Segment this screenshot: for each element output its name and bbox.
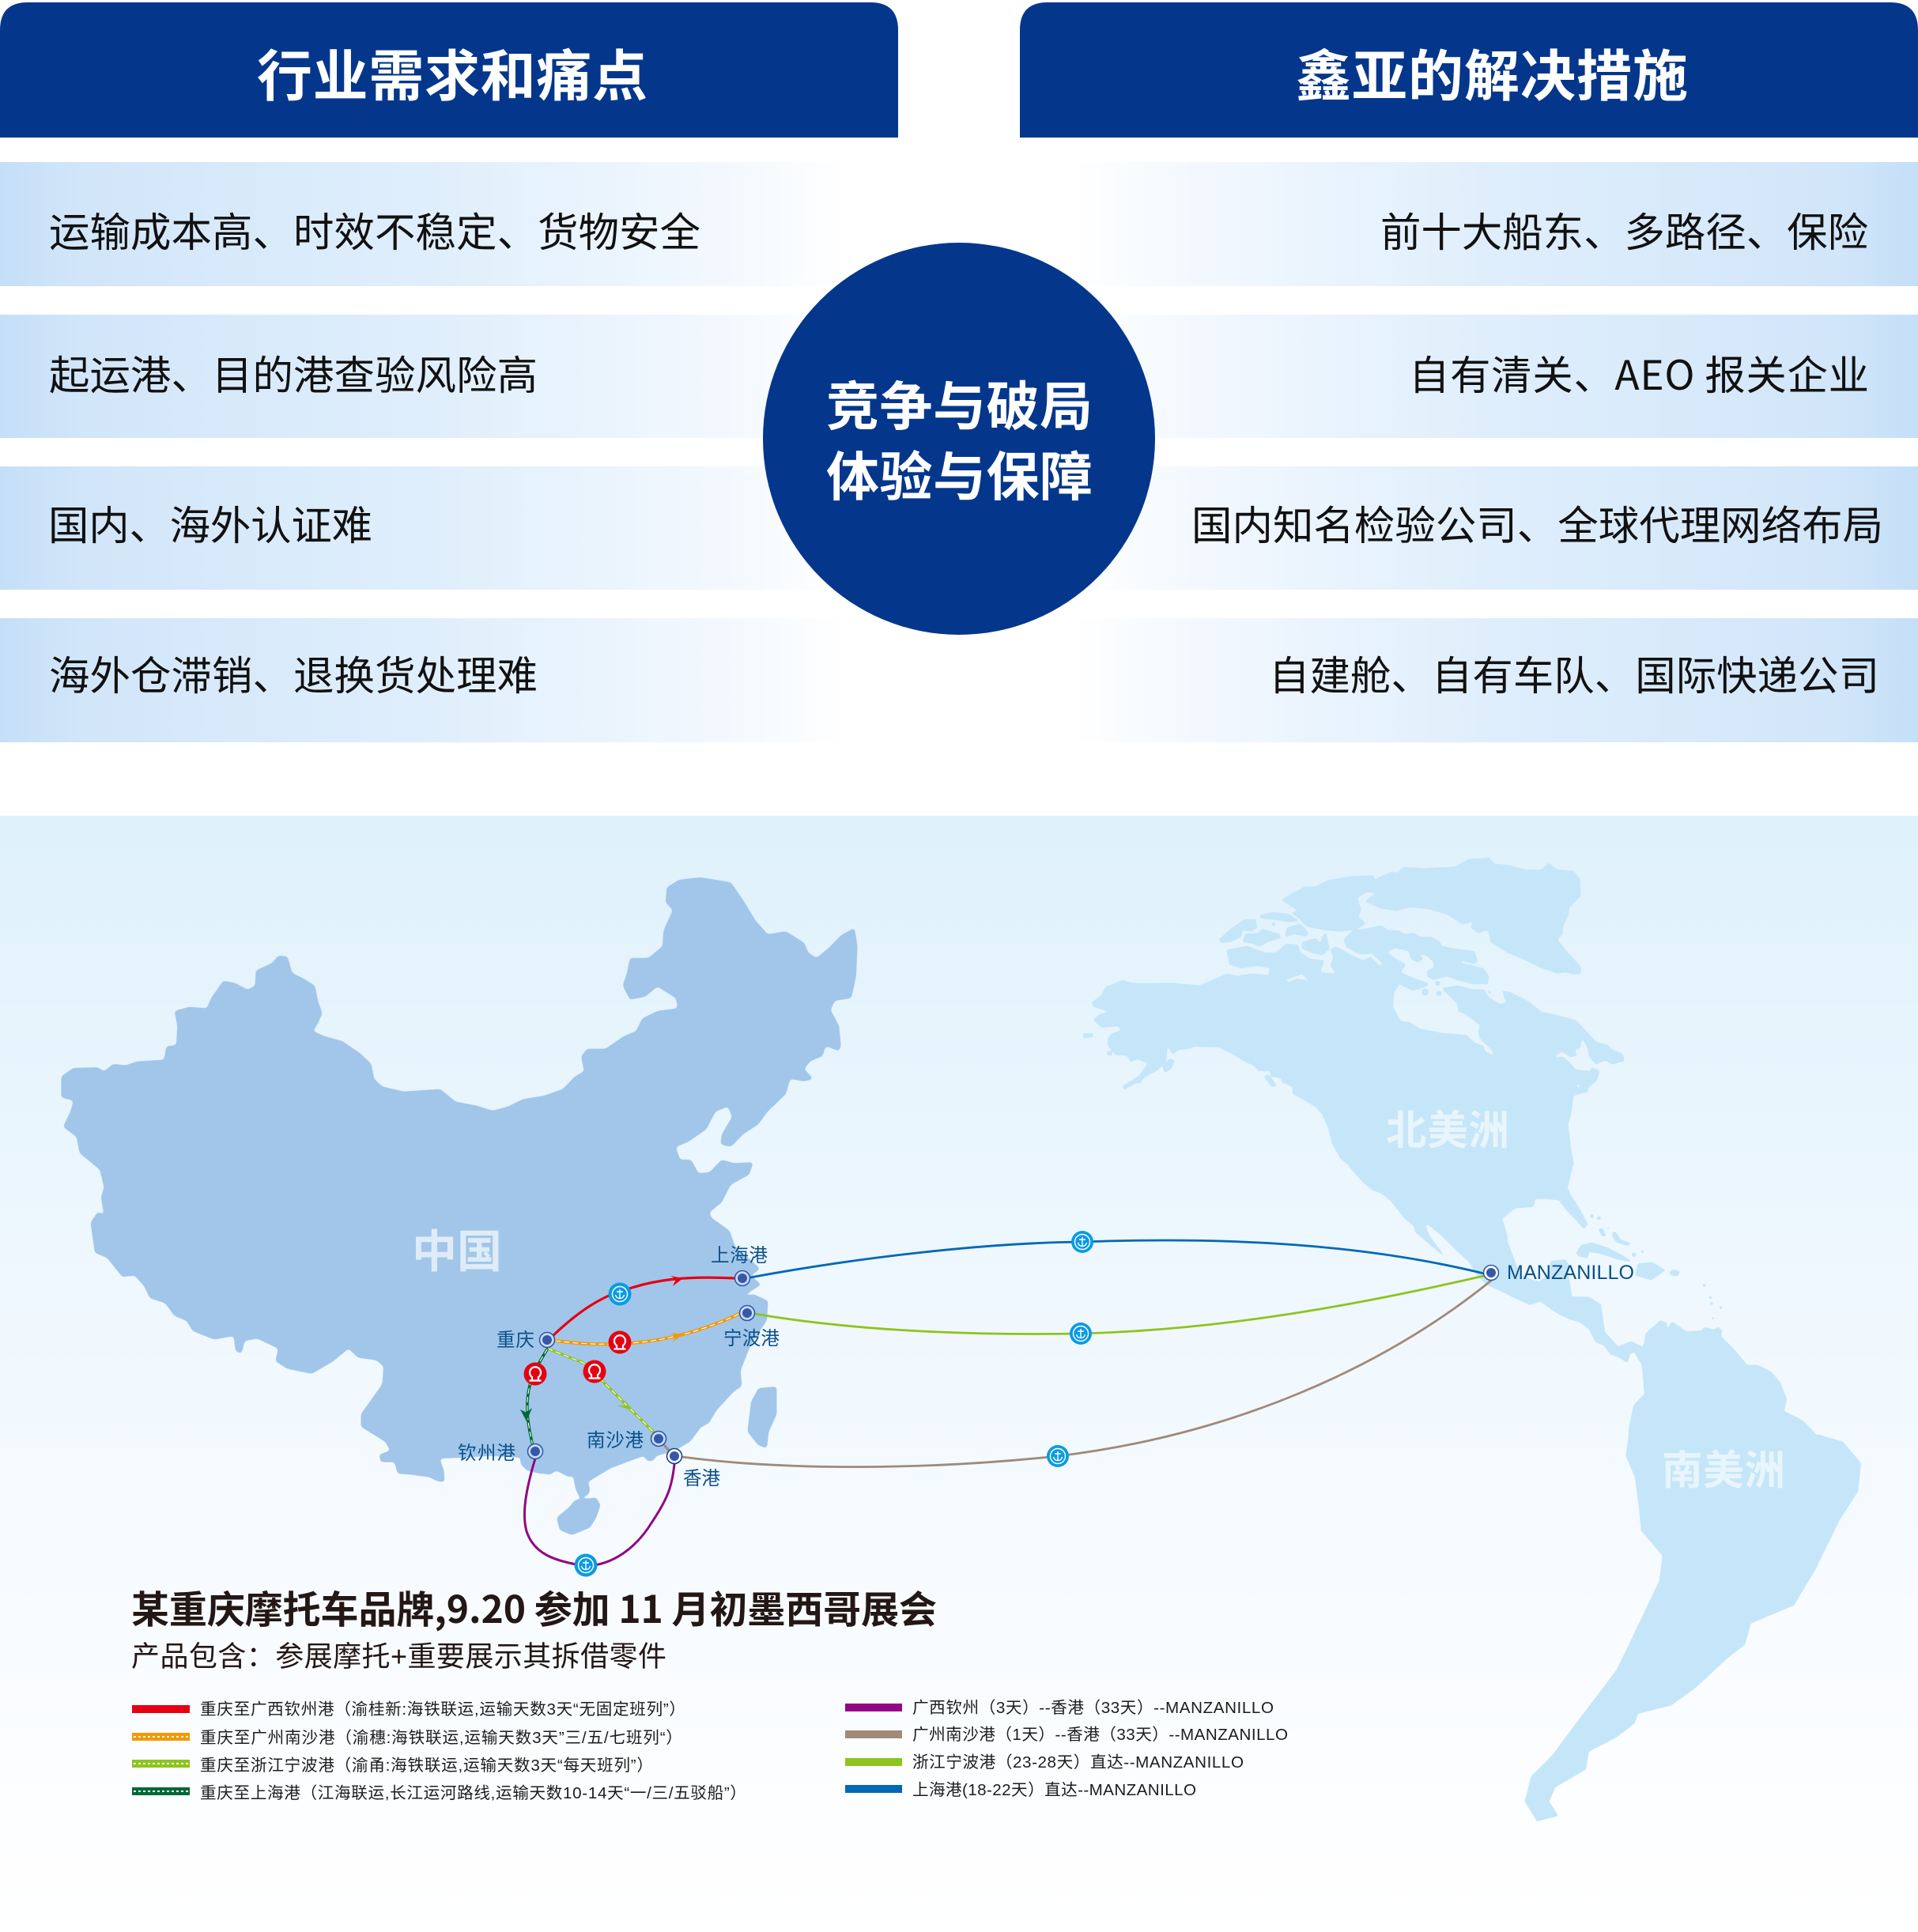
port labels: MANZANILLO (1507, 1262, 1634, 1284)
subtitle: 产品包含：参展摩托+重要展示其拆借零件 (131, 1640, 666, 1673)
arrowheads (520, 1276, 683, 1421)
route: Shanghai to Manzanillo (750, 1240, 1484, 1277)
map: Americas (1083, 858, 1861, 1821)
icon: anchor on Hong Kong to Manzanillo (1047, 1445, 1069, 1467)
row: inspection (0, 315, 846, 438)
row: cost (0, 162, 846, 286)
header: 鑫亚的解决措施: 鑫亚的解决措施 (1296, 46, 1688, 108)
panel: solutions (1072, 162, 1918, 742)
row: fleet (1072, 618, 1918, 742)
legend item: light green: 重庆至浙江宁波港（渝甬:海铁联运,运输天数3天“每天班列”） (200, 1757, 653, 1775)
icon: anchor on Ningbo to Manzanillo (1070, 1323, 1092, 1345)
row: inspection: 起运港、目的港查验风险高 (49, 353, 538, 398)
legend item: orange: 重庆至广州南沙港（渝穗:海铁联运,运输天数3天”三/五/七班列“） (200, 1729, 682, 1747)
legend: sea routes (845, 1699, 1288, 1799)
icon: anchor on Shanghai to Manzanillo (1071, 1231, 1093, 1253)
route: Chongqing to Shanghai (551, 1277, 734, 1338)
row: customs: 自有清关、AEO 报关企业 (1409, 342, 1869, 402)
Alaska and northwest (1083, 974, 1391, 1202)
map label: 南美洲: 南美洲 (1662, 1447, 1785, 1493)
port labels: 上海港 (711, 1245, 768, 1266)
port labels: 香港 (683, 1468, 720, 1489)
center circle (763, 243, 1155, 635)
header: 行业需求和痛点 (0, 2, 898, 138)
row: overseas warehouse: 海外仓滞销、退换货处理难 (49, 653, 538, 699)
port labels: 钦州港 (458, 1443, 515, 1464)
row: network (1072, 466, 1918, 590)
Canada and Greenland (1210, 858, 1624, 1091)
route: Nansha to Hong Kong (663, 1443, 674, 1456)
map: Taiwan (747, 1387, 776, 1448)
icon: anchor on Chongqing to Shanghai (609, 1282, 631, 1306)
row: fleet: 自建舱、自有车队、国际快递公司 (1269, 653, 1879, 699)
icon: rail Chongqing to Ningbo (609, 1331, 631, 1353)
row: certification (0, 466, 846, 590)
node: Manzanillo (1483, 1265, 1499, 1281)
map: China (61, 877, 858, 1535)
title: 某重庆摩托车品牌,9.20 参加 11 月初墨西哥展会 (131, 1579, 937, 1634)
South America (1525, 1435, 1861, 1821)
header: 行业需求和痛点: 行业需求和痛点 (257, 46, 648, 108)
legend item: red: 重庆至广西钦州港（渝桂新:海铁联运,运输天数3天“无固定班列”） (200, 1700, 685, 1719)
icon: anchor on Qinzhou to Hong Kong (574, 1554, 598, 1576)
node: Hong Kong (667, 1448, 681, 1464)
port labels (458, 1245, 1634, 1489)
node: Shanghai (735, 1271, 749, 1285)
map background (0, 816, 1918, 1932)
small islands (1271, 923, 1722, 1319)
map: Hainan (557, 1497, 601, 1535)
route: Qinzhou to Hong Kong (524, 1458, 674, 1566)
Central America and Caribbean (1407, 1186, 1818, 1439)
row: cost: 运输成本高、时效不稳定、货物安全 (49, 209, 700, 255)
node: Nansha (651, 1431, 666, 1447)
route: Hong Kong to Manzanillo (682, 1281, 1491, 1467)
port labels: 南沙港 (587, 1430, 644, 1451)
row: overseas warehouse (0, 618, 846, 742)
route: Chongqing to Nansha (548, 1349, 654, 1432)
United States body (1372, 1087, 1589, 1221)
port labels: 重庆 (496, 1330, 534, 1351)
map label: 北美洲: 北美洲 (1386, 1108, 1509, 1153)
icon: rail Chongqing to Nansha (583, 1360, 606, 1383)
row: customs (1072, 315, 1918, 438)
port labels: 宁波港 (723, 1328, 780, 1349)
legend item: lime: 浙江宁波港（23-28天）直达--MANZANILLO (912, 1753, 1244, 1772)
legend item: blue: 上海港(18-22天）直达--MANZANILLO (912, 1781, 1196, 1799)
header: 鑫亚的解决措施 (1020, 2, 1918, 138)
route: Chongqing to Qinzhou (527, 1349, 547, 1449)
port nodes (528, 1265, 1499, 1464)
node: Chongqing (539, 1333, 555, 1347)
legend item: brown: 广州南沙港（1天）--香港（33天）--MANZANILLO (912, 1726, 1288, 1744)
node: Qinzhou (528, 1443, 542, 1459)
legend item: dark green: 重庆至上海港（江海联运,长江运河路线,运输天数10-14天“一/三/五驳船”） (200, 1784, 746, 1802)
row: network: 国内知名检验公司、全球代理网络布局 (1191, 503, 1883, 549)
legend item: purple: 广西钦州（3天）--香港（33天）--MANZANILLO (912, 1699, 1274, 1717)
node: Ningbo (740, 1306, 754, 1320)
icon: rail Chongqing to Qinzhou (523, 1363, 547, 1385)
panel: pain points (0, 162, 846, 742)
center circle: 体验与保障 (826, 448, 1093, 508)
row: carriers (1072, 162, 1918, 286)
route: Ningbo to Manzanillo (755, 1276, 1484, 1334)
map label: 中国: 中国 (412, 1227, 502, 1277)
center circle: 竞争与破局 (826, 378, 1093, 437)
legend: rail routes (132, 1700, 746, 1802)
row: certification: 国内、海外认证难 (48, 503, 372, 549)
row: carriers: 前十大船东、多路径、保险 (1380, 209, 1868, 255)
route: Chongqing to Ningbo (556, 1314, 739, 1344)
routes (524, 1240, 1491, 1566)
